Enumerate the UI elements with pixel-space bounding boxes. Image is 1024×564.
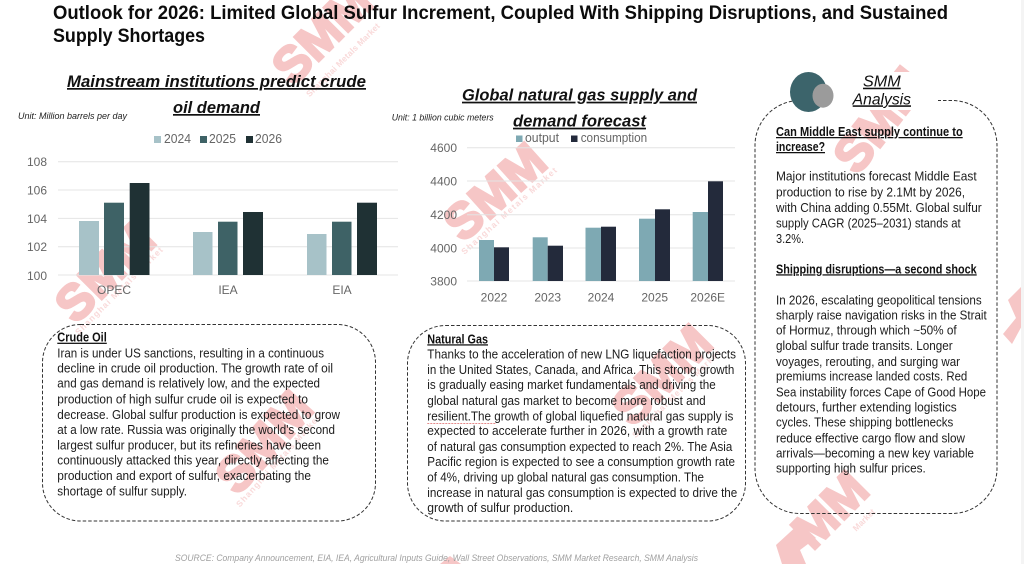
watermarks: SMM xyxy=(44,211,166,333)
text block: Middle East supply: Can Middle East supply continue to xyxy=(776,125,963,139)
watermarks: SMM xyxy=(601,314,723,436)
bar chart: natural gas supply and demand: 4200 xyxy=(430,208,457,222)
watermarks: Market xyxy=(851,507,877,533)
watermarks: Shanghai Metals Market xyxy=(73,245,165,337)
text block: shipping disruptions: supporting high sulfur prices. xyxy=(776,462,926,476)
bar chart: natural gas supply and demand: 4000 xyxy=(430,242,457,256)
panel: natural gas: expected to accelerate further in 2026, with a growth rate xyxy=(427,424,727,438)
bar chart: crude oil demand xyxy=(27,131,398,297)
unit label: oil: Unit: Million barrels per day xyxy=(18,111,128,122)
panel: crude oil: largest sulfur producer, but its refineries have been xyxy=(57,438,321,452)
panel: natural gas: global natural gas market to become more robust and xyxy=(427,394,706,408)
text block: shipping disruptions xyxy=(776,262,987,476)
heading: crude oil demand chart: oil demand xyxy=(173,98,261,117)
title: Outlook for 2026: Limited Global Sulfur Increment, Coupled With Shipping Disruptions, and Sustained xyxy=(53,2,948,24)
bar chart: crude oil demand: OPEC xyxy=(97,283,131,297)
bar chart: crude oil demand: EIA xyxy=(332,283,352,297)
panel: natural gas: growth of sulfur production. xyxy=(427,501,573,515)
text block: shipping disruptions: cycles. These shipping bottlenecks xyxy=(776,416,953,430)
panel: natural gas: resilient.The growth of global liquefied natural gas supply is xyxy=(427,409,733,423)
heading: crude oil demand chart xyxy=(67,72,366,117)
bar chart: crude oil demand: 106 xyxy=(27,184,47,198)
text block: Middle East supply: with China adding 0.55Mt. Global sulfur xyxy=(775,201,982,215)
bar chart: crude oil demand: 108 xyxy=(27,155,47,169)
panel: SMM analysis xyxy=(755,72,997,514)
bar chart: crude oil demand: 100 xyxy=(27,269,47,283)
bar chart: crude oil demand: 104 xyxy=(27,212,47,226)
panel: natural gas: of natural gas consumption expected to reach 2%. The Asia xyxy=(427,440,732,454)
panel: crude oil: decline in crude oil production. The growth rate of oil xyxy=(57,362,333,376)
text block: shipping disruptions: global sulfur trade transits. Longer xyxy=(776,339,953,353)
legend: gas chart: output xyxy=(525,130,559,145)
panel: natural gas: increase in natural gas consumption is expected to drive the xyxy=(427,486,737,500)
bar chart: crude oil demand: IEA xyxy=(218,283,238,297)
watermarks: Shanghai Metals Market xyxy=(459,165,559,256)
panel: natural gas xyxy=(408,326,746,521)
text block: Middle East supply: supply CAGR (2025–2031) stands at xyxy=(776,216,961,230)
panel: crude oil: production of high sulfur crude oil is expected to xyxy=(57,392,308,406)
bar chart: natural gas supply and demand: 2024 xyxy=(588,291,615,305)
panel: natural gas: Pacific region is expected to see a consumption growth rate xyxy=(427,455,735,469)
heading: natural gas chart: demand forecast xyxy=(513,112,647,131)
text block: shipping disruptions: Shipping disruptions—a second shock xyxy=(776,262,978,276)
panel: natural gas: Natural Gas xyxy=(427,332,488,346)
legend: oil chart xyxy=(154,131,282,146)
legend: oil chart: 2024 xyxy=(164,131,191,146)
text block: shipping disruptions: Sea instability forces Cape of Good Hope xyxy=(776,386,986,400)
bar chart: natural gas supply and demand: 2026E xyxy=(690,291,725,305)
panel: crude oil: and gas demand is relatively low, and the expected xyxy=(57,377,320,391)
panel: crude oil: production and export of sulfur, exacerbating the xyxy=(57,469,311,483)
heading: natural gas chart: Global natural gas supply and xyxy=(462,86,698,105)
title: Supply Shortages xyxy=(53,25,205,47)
panel: natural gas: Thanks to the acceleration of new LNG liquefaction projects xyxy=(427,348,736,362)
text block: shipping disruptions: arrivals—becoming a new key variable xyxy=(776,446,974,460)
text block: Middle East supply: production to rise by 2.1Mt by 2026, xyxy=(776,186,965,200)
bar chart: natural gas supply and demand: 4600 xyxy=(430,141,457,155)
watermarks: SMM xyxy=(204,380,324,504)
text block: shipping disruptions: voyages, rerouting, and surging war xyxy=(776,355,960,369)
unit label: gas: Unit: 1 billion cubic meters xyxy=(392,113,494,124)
icon: overlapping circles xyxy=(790,72,834,112)
source line: SOURCE: Company Announcement, EIA, IEA, Agricultural Inputs Guide, Wall Street Observations, SMM Market Research, SMM Analysis xyxy=(175,553,698,564)
legend: oil chart: 2026 xyxy=(255,131,282,146)
text block: shipping disruptions: of Hormuz, through which ~50% of xyxy=(776,324,957,338)
heading: natural gas chart xyxy=(462,86,698,131)
panel: crude oil: decrease. Global sulfur production is expected to grow xyxy=(57,408,341,422)
bar chart: natural gas supply and demand: 4400 xyxy=(430,174,457,188)
watermarks: SMM xyxy=(433,132,557,252)
panel: natural gas: is gradually easing market fundamentals and driving the xyxy=(427,378,716,392)
heading: SMM analysis: Analysis xyxy=(852,91,911,108)
bar chart: crude oil demand: 102 xyxy=(27,240,47,254)
panel: crude oil: at a low rate. Russia was originally the world's second xyxy=(57,423,335,437)
text block: shipping disruptions: detours, further extending logistics xyxy=(776,401,957,415)
watermarks: Shanghai Metals Market xyxy=(630,348,722,440)
panel: crude oil xyxy=(42,324,376,521)
text block: shipping disruptions: premiums increase landed costs. Red xyxy=(776,370,967,384)
panel: crude oil: shortage of sulfur supply. xyxy=(57,485,187,499)
bar chart: natural gas supply and demand xyxy=(430,130,735,305)
text block: Middle East supply: increase? xyxy=(776,140,825,154)
legend: gas chart xyxy=(516,130,647,145)
legend: oil chart: 2025 xyxy=(209,131,236,146)
title xyxy=(53,2,948,47)
panel: crude oil: continuously attacked this year, directly affecting the xyxy=(57,453,329,467)
panel: crude oil: Crude Oil xyxy=(57,331,107,345)
watermarks: Shanghai Metals Market xyxy=(234,413,322,509)
text block: shipping disruptions: sharply raise navigation risks in the Strait xyxy=(776,308,987,322)
panel: crude oil: Iran is under US sanctions, resulting in a continuous xyxy=(57,346,324,360)
bar chart: natural gas supply and demand: 3800 xyxy=(430,274,457,288)
heading: SMM analysis xyxy=(852,74,911,108)
text block: Middle East supply: Major institutions forecast Middle East xyxy=(776,170,977,184)
text block: Middle East supply xyxy=(775,125,982,246)
watermarks: MM xyxy=(781,461,879,559)
heading: SMM analysis: SMM xyxy=(863,74,901,91)
panel: natural gas: in the United States, Canada, and Africa. This strong growth xyxy=(427,363,734,377)
text block: shipping disruptions: reduce effective cargo flow and slow xyxy=(776,432,966,446)
watermarks: SMM xyxy=(822,57,938,183)
legend: gas chart: consumption xyxy=(581,130,647,145)
bar chart: natural gas supply and demand: 2022 xyxy=(481,291,508,305)
text block: shipping disruptions: In 2026, escalating geopolitical tensions xyxy=(776,293,982,307)
bar chart: natural gas supply and demand: 2023 xyxy=(534,291,561,305)
watermarks: Shanghai Metals Market xyxy=(304,21,382,99)
bar chart: natural gas supply and demand: 2025 xyxy=(641,291,668,305)
panel: natural gas: of 4%, driving up global natural gas consumption. The xyxy=(427,470,704,484)
heading: crude oil demand chart: Mainstream institutions predict crude xyxy=(67,72,366,91)
text block: Middle East supply: 3.2%. xyxy=(776,232,804,246)
